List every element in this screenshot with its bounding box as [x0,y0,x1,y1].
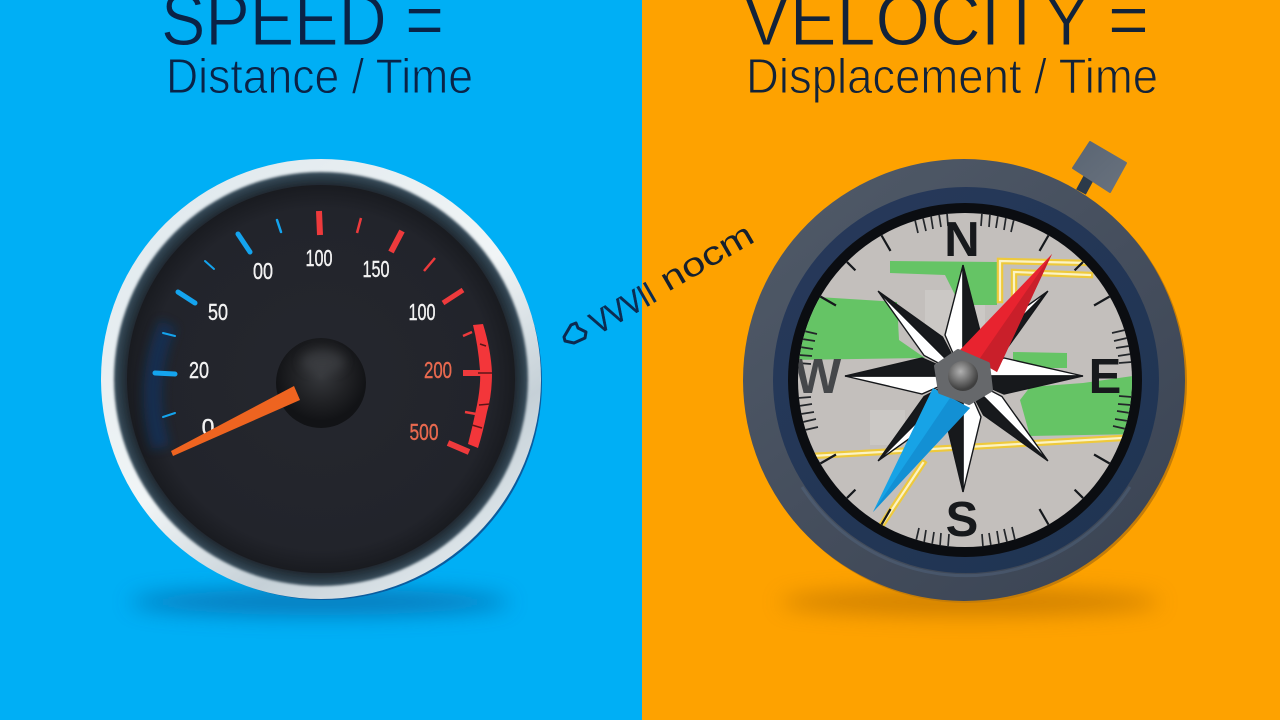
map base [790,205,1140,555]
gauge scale labels: 200 [424,357,452,383]
compass [743,142,1187,615]
gauge centre hub [276,338,366,428]
gauge scale labels: 00 [253,258,273,284]
icon: link outline [564,323,586,343]
heading: velocity formula [743,0,1158,104]
gauge low-speed glow [144,320,176,450]
compass shadow [780,589,1160,615]
dial fine ticks [915,213,1014,233]
dial long ticks [820,235,1110,525]
cardinal letter S: S [946,493,978,547]
heading: speed formula [161,0,473,104]
gauge steel ring [114,172,528,586]
gauge scale labels: 0 [202,414,214,440]
gauge dial face [127,185,515,573]
compass needle: red north end [960,254,1052,372]
gauge scale labels [189,245,452,445]
compass centre hub [936,351,991,403]
map roads [812,261,1122,523]
gauge scale labels: 50 [208,299,228,325]
heading: speed formula: Distance / Time [166,50,473,104]
link label: right part: nocm [653,215,760,298]
red tick marks [319,211,487,452]
panel: speed background [0,0,642,720]
compass rose [845,265,1083,492]
compass ring highlight [802,487,1130,576]
panel: velocity background [642,0,1280,720]
map green areas [790,261,1140,436]
map light patches [870,290,985,445]
gauge scale labels: 150 [362,256,390,282]
cardinal letter E: E [1089,350,1121,404]
cardinal letter N: N [944,213,980,267]
compass knob cap [1073,142,1126,192]
blue tick marks [155,220,281,417]
gauge needle [171,386,300,456]
compass centre pin [948,361,978,391]
gauge scale labels: 100 [408,299,436,325]
cardinal letter W: W [795,350,842,404]
compass knob stem [1081,168,1094,192]
compass orange underside [745,161,1187,603]
gauge scale labels: 100 [306,245,332,271]
heading: velocity formula: Displacement / Time [746,50,1158,104]
compass map dial [790,205,1140,555]
compass black ring [788,203,1142,557]
gauge backing crescent [106,164,542,600]
gauge scale labels: 500 [410,419,438,445]
link text across the divide [564,215,760,343]
red zone arc notches [472,344,492,428]
gauge white bezel [101,159,541,599]
gauge scale labels: 20 [189,357,209,383]
gauge shadow [130,589,510,615]
speedometer gauge [101,159,542,615]
red zone arc [468,324,492,448]
compass outer ring [743,159,1185,601]
link label: left part: VVVII [584,275,662,341]
compass needle: blue south end [873,388,970,512]
compass navy ring [773,187,1159,573]
